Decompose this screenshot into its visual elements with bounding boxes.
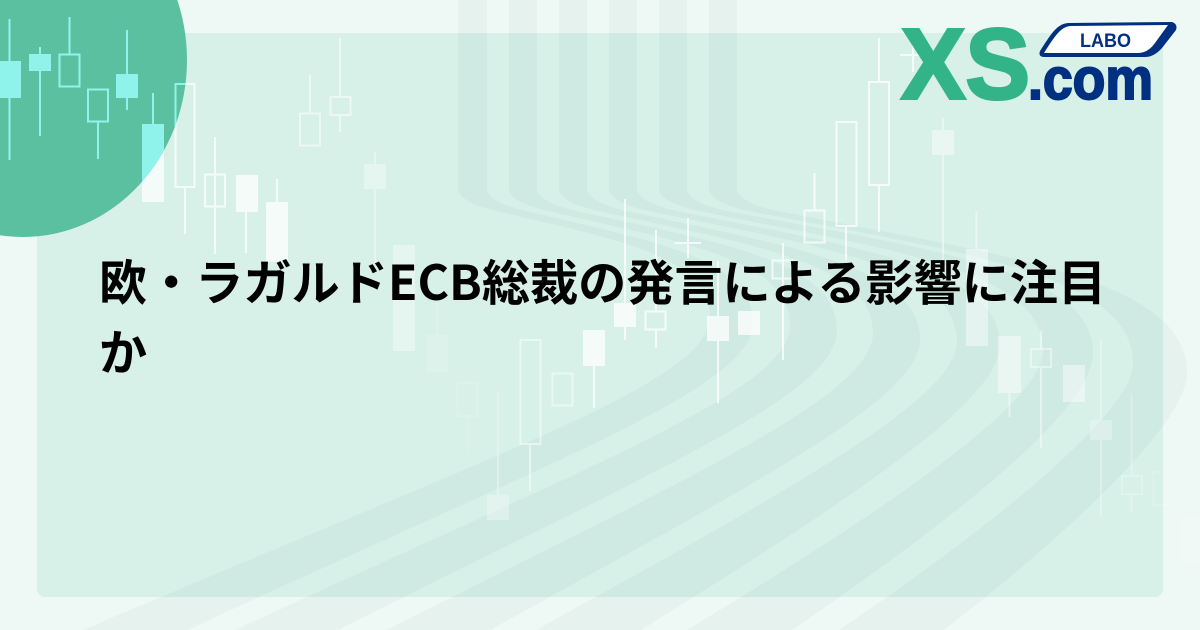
title: 欧・ラガルドECB総裁の発言による影響に注目 bbox=[99, 244, 1106, 314]
candlesticks inside circle bbox=[0, 17, 186, 182]
title: か bbox=[99, 314, 147, 384]
logo wordmark XS: XS bbox=[901, 8, 1030, 120]
logo badge LABO bbox=[1040, 22, 1176, 57]
logo: XS.com LABO bbox=[901, 8, 1176, 120]
decorative green circle bbox=[0, 0, 187, 237]
logo wordmark .com: .com bbox=[1028, 47, 1153, 112]
title bbox=[99, 244, 1106, 384]
logo badge LABO: LABO bbox=[1080, 31, 1131, 52]
